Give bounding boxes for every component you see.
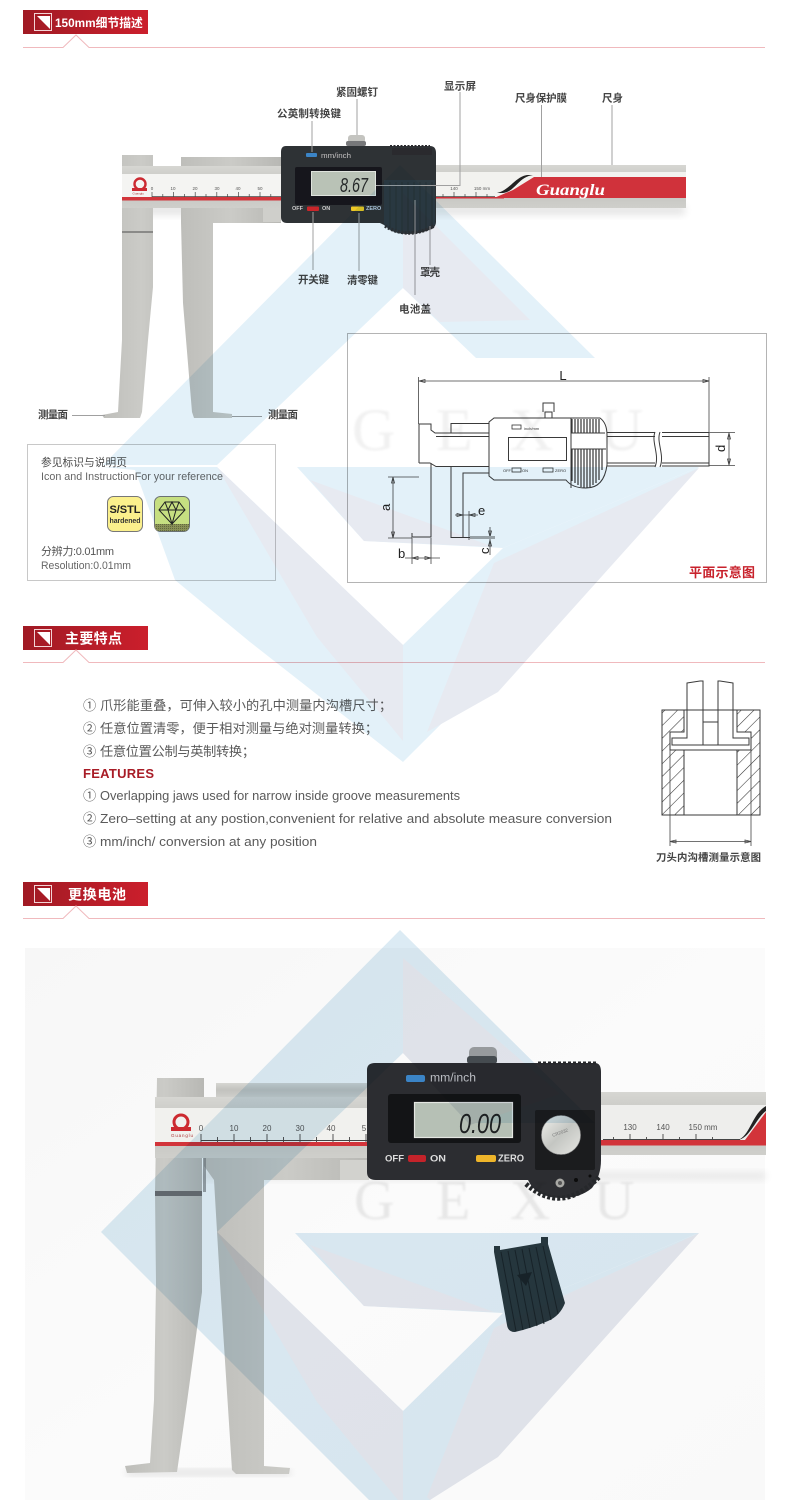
text block: English features: mm/inch/ conversion at any position xyxy=(100,834,317,849)
diagram: groove measurement: 刀头内沟槽测量示意图 xyxy=(656,851,761,864)
label: left measuring face xyxy=(38,408,105,421)
text block: Chinese features: ③ xyxy=(83,744,96,759)
text block: English features: ① xyxy=(83,788,96,803)
beam xyxy=(216,1083,369,1097)
label: beam film: 尺身保护膜 xyxy=(515,92,568,104)
display housing xyxy=(367,1063,601,1198)
display housing: OFF xyxy=(385,1154,404,1164)
dimension d xyxy=(709,432,735,466)
dimension L: L xyxy=(559,368,567,383)
dimension c: c xyxy=(477,547,492,554)
text block: English features: ③ xyxy=(83,834,96,849)
dimension e: e xyxy=(478,503,485,518)
watermark: lower GEXU lettering: G xyxy=(354,1170,394,1232)
caliper outline: ON xyxy=(522,468,528,473)
scale numbers: 10 xyxy=(170,186,176,191)
label: left measuring face: 测量面 xyxy=(38,408,68,421)
scale numbers: 150 mm xyxy=(689,1123,718,1132)
scale numbers: 5 xyxy=(362,1124,367,1133)
info panel: icons and resolution xyxy=(28,444,276,580)
text block: Chinese features: 任意位置公制与英制转换； xyxy=(100,743,255,760)
scale numbers: 20 xyxy=(192,186,198,191)
scale numbers: 0 xyxy=(151,186,154,191)
section header: replace battery xyxy=(23,882,765,918)
text block: English features: Zero–setting at any postion,convenient for relative and absolute measure conversion xyxy=(100,811,612,826)
logo: Guanglu xyxy=(132,192,144,196)
info panel: icons and resolution: Icon and InstructionFor your reference xyxy=(41,471,223,483)
label: right measuring face: 测量面 xyxy=(268,408,298,421)
panel: plan-view dimension drawing xyxy=(348,334,766,582)
label: mm/inch key: 公英制转换键 xyxy=(277,107,342,120)
scale ticks xyxy=(152,192,495,197)
text block: Chinese features xyxy=(83,698,392,760)
scale numbers: 10 xyxy=(230,1124,239,1133)
section header: 150mm details xyxy=(23,10,765,48)
beam xyxy=(122,166,282,208)
watermark: upper GEXU lettering: X xyxy=(510,397,553,463)
scale numbers: 30 xyxy=(214,186,220,191)
label: clamp screw: 紧固螺钉 xyxy=(336,86,378,98)
diagram: groove measurement xyxy=(656,681,761,864)
scale numbers: 50 xyxy=(257,186,263,191)
info panel: icons and resolution: 分辨力:0.01mm xyxy=(41,544,114,558)
dimension a xyxy=(378,477,419,538)
moving jaw xyxy=(204,1158,369,1474)
watermark: lower GEXU lettering xyxy=(354,1170,634,1232)
label: on/off key: 开关键 xyxy=(298,273,330,286)
display housing xyxy=(281,146,436,234)
watermark: upper GEXU lettering: U xyxy=(600,397,643,463)
caliper outline xyxy=(412,403,709,538)
display housing: ON xyxy=(430,1154,446,1164)
screw xyxy=(467,1047,497,1064)
dimension d: d xyxy=(713,445,728,452)
label: clamp screw xyxy=(336,86,378,135)
display housing: mm/inch xyxy=(430,1072,476,1084)
watermark: lower GEXU lettering: U xyxy=(594,1170,634,1232)
dimension a: a xyxy=(378,503,393,511)
dimension b xyxy=(398,538,440,564)
text block: English features: ② xyxy=(83,811,96,826)
scale numbers: 140 xyxy=(450,186,458,191)
label: zero key: 清零键 xyxy=(347,274,378,286)
icon: S/STL hardened: hardened xyxy=(110,518,140,525)
label: battery cover: 电池盖 xyxy=(399,302,432,316)
display housing: OFF xyxy=(292,206,304,212)
scale numbers: 40 xyxy=(235,186,241,191)
section header: 150mm details: 150mm细节描述 xyxy=(55,16,143,30)
scale numbers: 140 xyxy=(656,1123,670,1132)
main caliper photo xyxy=(102,135,686,418)
brand script: Guanglu xyxy=(536,182,605,199)
text block: Chinese features: 爪形能重叠，可伸入较小的孔中测量内沟槽尺寸； xyxy=(100,698,392,714)
ruler face right xyxy=(434,172,686,197)
info panel: icons and resolution: Resolution:0.01mm xyxy=(41,560,131,572)
text block: English features xyxy=(83,788,612,849)
display housing: ZERO xyxy=(498,1154,524,1164)
dimension c xyxy=(470,527,495,555)
fixed jaw xyxy=(102,155,181,418)
icon: S/STL hardened: S/STL xyxy=(110,504,141,516)
screw xyxy=(346,135,366,146)
fixed jaw xyxy=(125,1078,204,1473)
text block: English features: Overlapping jaws used for narrow inside groove measurements xyxy=(100,788,460,803)
display housing: mm/inch xyxy=(321,153,351,160)
watermark: lower gem logo xyxy=(101,930,699,1500)
label: zero key xyxy=(347,213,378,286)
label: battery cover xyxy=(399,200,432,316)
photo: battery replacement xyxy=(25,948,766,1500)
scale numbers: 150 mm xyxy=(474,186,490,191)
label: on/off key xyxy=(298,212,330,286)
caliper outline: ZERO xyxy=(555,468,566,473)
ticks xyxy=(201,1134,740,1142)
battery compartment: CR2032 xyxy=(552,1127,569,1138)
caliper outline: inch/mm xyxy=(524,426,540,431)
display housing: ON xyxy=(322,206,330,212)
dimension b: b xyxy=(398,546,405,561)
ruler face left xyxy=(122,174,282,197)
battery cover part xyxy=(494,1237,565,1332)
watermark: upper gem logo xyxy=(103,165,699,762)
display housing: 0.00 xyxy=(459,1108,501,1139)
watermark: upper GEXU lettering: E xyxy=(436,397,473,463)
label: mm/inch key xyxy=(277,107,342,152)
watermark: upper GEXU lettering xyxy=(352,397,643,463)
caliper outline: OFF xyxy=(503,468,512,473)
display housing: ZERO xyxy=(366,206,382,212)
callout labels xyxy=(38,80,624,421)
display housing: 8.67 xyxy=(340,175,369,197)
text block: Chinese features: 任意位置清零，便于相对测量与绝对测量转换； xyxy=(100,720,378,737)
scale numbers: 130 xyxy=(623,1123,637,1132)
scale numbers: 30 xyxy=(296,1124,305,1133)
icon: diamond hardness xyxy=(154,496,190,532)
text block: Chinese features: ② xyxy=(83,721,96,736)
label: display xyxy=(376,80,476,186)
scale numbers: 20 xyxy=(263,1124,272,1133)
scale numbers: 0 xyxy=(199,1124,204,1133)
scale numbers xyxy=(151,186,490,191)
label: beam: 尺身 xyxy=(602,92,624,104)
dimension L xyxy=(418,368,709,432)
scale numbers xyxy=(199,1123,718,1133)
scale numbers: 40 xyxy=(327,1124,336,1133)
label: cover shell: 罩壳 xyxy=(420,266,440,278)
watermark: lower GEXU lettering: E xyxy=(436,1170,470,1232)
label: right measuring face xyxy=(232,408,298,421)
label: display: 显示屏 xyxy=(444,80,476,92)
label: beam xyxy=(602,92,624,165)
watermark: lower GEXU lettering: X xyxy=(510,1170,550,1232)
watermark: upper GEXU lettering: G xyxy=(352,397,395,463)
logo: Guanglu xyxy=(171,1133,193,1138)
dimension e xyxy=(455,503,485,540)
section header: main features xyxy=(23,626,765,662)
battery compartment xyxy=(535,1110,595,1188)
info panel: icons and resolution: 参见标识与说明页 xyxy=(41,456,127,469)
heading: FEATURES: FEATURES xyxy=(83,766,154,781)
logo xyxy=(132,178,147,196)
moving jaw xyxy=(181,157,281,418)
logo xyxy=(171,1115,193,1138)
section header: main features: 主要特点 xyxy=(65,630,122,646)
text block: Chinese features: ① xyxy=(83,698,96,713)
label: cover shell xyxy=(420,226,440,278)
label: beam film xyxy=(515,92,568,177)
section header: replace battery: 更换电池 xyxy=(68,886,126,902)
panel caption: 平面示意图 xyxy=(689,565,755,580)
icon: S/STL hardened xyxy=(108,496,142,532)
beam right end xyxy=(434,165,686,208)
